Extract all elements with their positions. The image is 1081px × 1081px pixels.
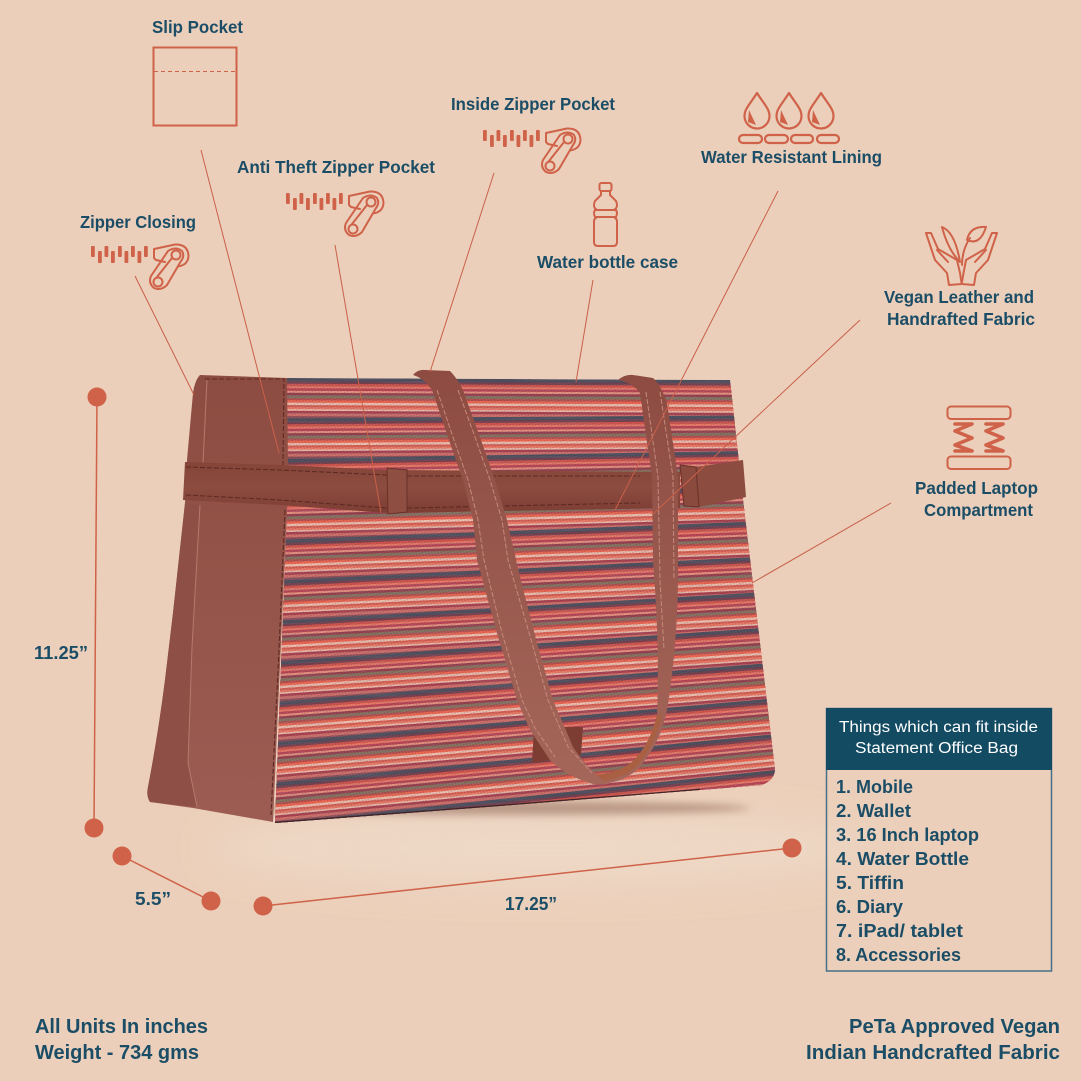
back strap	[590, 375, 678, 784]
item list: 7. iPad/ tablet	[836, 920, 963, 941]
heading: Anti Theft Zipper Pocket	[237, 157, 435, 177]
belt keeper right	[680, 465, 699, 507]
belt keeper left	[387, 468, 407, 514]
dimension: width	[254, 838, 802, 916]
icon: spring padding	[948, 406, 1010, 469]
front strap	[413, 370, 607, 785]
footer note: units and weight	[35, 1016, 208, 1064]
heading: Zipper Closing	[80, 212, 196, 232]
icon: pocket	[154, 48, 236, 126]
footer note: units and weight: All Units In inches	[35, 1016, 208, 1038]
callout: inside zipper pocket	[451, 94, 615, 173]
item list	[836, 776, 979, 965]
panel: things which can fit inside	[826, 708, 1052, 971]
heading: Compartment	[924, 500, 1033, 520]
heading: Slip Pocket	[152, 17, 243, 37]
leather belt	[183, 462, 680, 513]
heading: Water bottle case	[537, 252, 678, 272]
footer note: vegan and handcrafted	[806, 1016, 1060, 1064]
heading: Vegan Leather and	[884, 287, 1034, 307]
item list: 2. Wallet	[836, 800, 911, 821]
heading: Inside Zipper Pocket	[451, 94, 615, 114]
floor light and shadow	[210, 801, 870, 886]
footer note: units and weight: Weight - 734 gms	[35, 1042, 199, 1064]
item list: 4. Water Bottle	[836, 848, 969, 869]
leather side panel	[147, 375, 288, 822]
item list: 5. Tiffin	[836, 872, 904, 893]
belt right end	[696, 460, 746, 507]
panel header: Statement Office Bag	[855, 740, 1018, 757]
icon: bottle	[594, 183, 617, 246]
footer note: vegan and handcrafted: Indian Handcrafted Fabric	[806, 1042, 1060, 1064]
icon: zipper	[286, 191, 384, 236]
heading	[884, 287, 1035, 329]
icon: zipper	[483, 128, 580, 173]
panel header	[826, 708, 1052, 770]
icon: hands and leaves	[926, 227, 997, 285]
dimension: depth: 5.5”	[135, 889, 171, 909]
item list: 3. 16 Inch laptop	[836, 824, 979, 845]
item list: 1. Mobile	[836, 776, 913, 797]
callout: zipper closing	[80, 212, 196, 289]
item list: 6. Diary	[836, 896, 904, 917]
heading: Water Resistant Lining	[701, 147, 882, 167]
callout: slip pocket	[152, 17, 243, 126]
icon: water drops	[739, 93, 839, 143]
item list: 8. Accessories	[836, 944, 961, 965]
leader lines	[135, 150, 891, 583]
panel header: Things which can fit inside	[839, 719, 1038, 736]
fabric panel	[275, 378, 775, 823]
footer note: vegan and handcrafted: PeTa Approved Vegan	[849, 1016, 1060, 1038]
callout: anti theft zipper pocket	[237, 157, 435, 236]
heading: Handrafted Fabric	[887, 309, 1035, 329]
bag photo	[147, 370, 775, 823]
heading	[915, 478, 1038, 520]
heading: Padded Laptop	[915, 478, 1038, 498]
dimension: height: 11.25”	[34, 643, 88, 663]
dimension: width: 17.25”	[505, 894, 557, 914]
callout: water bottle case	[537, 183, 678, 272]
callout: padded laptop compartment	[915, 406, 1038, 520]
dimension: depth	[112, 846, 220, 910]
logo patch	[532, 727, 583, 763]
dimension: height	[34, 388, 106, 838]
icon: zipper	[91, 244, 188, 289]
callout: vegan leather	[884, 227, 1035, 329]
callout: water resistant lining	[701, 93, 882, 167]
